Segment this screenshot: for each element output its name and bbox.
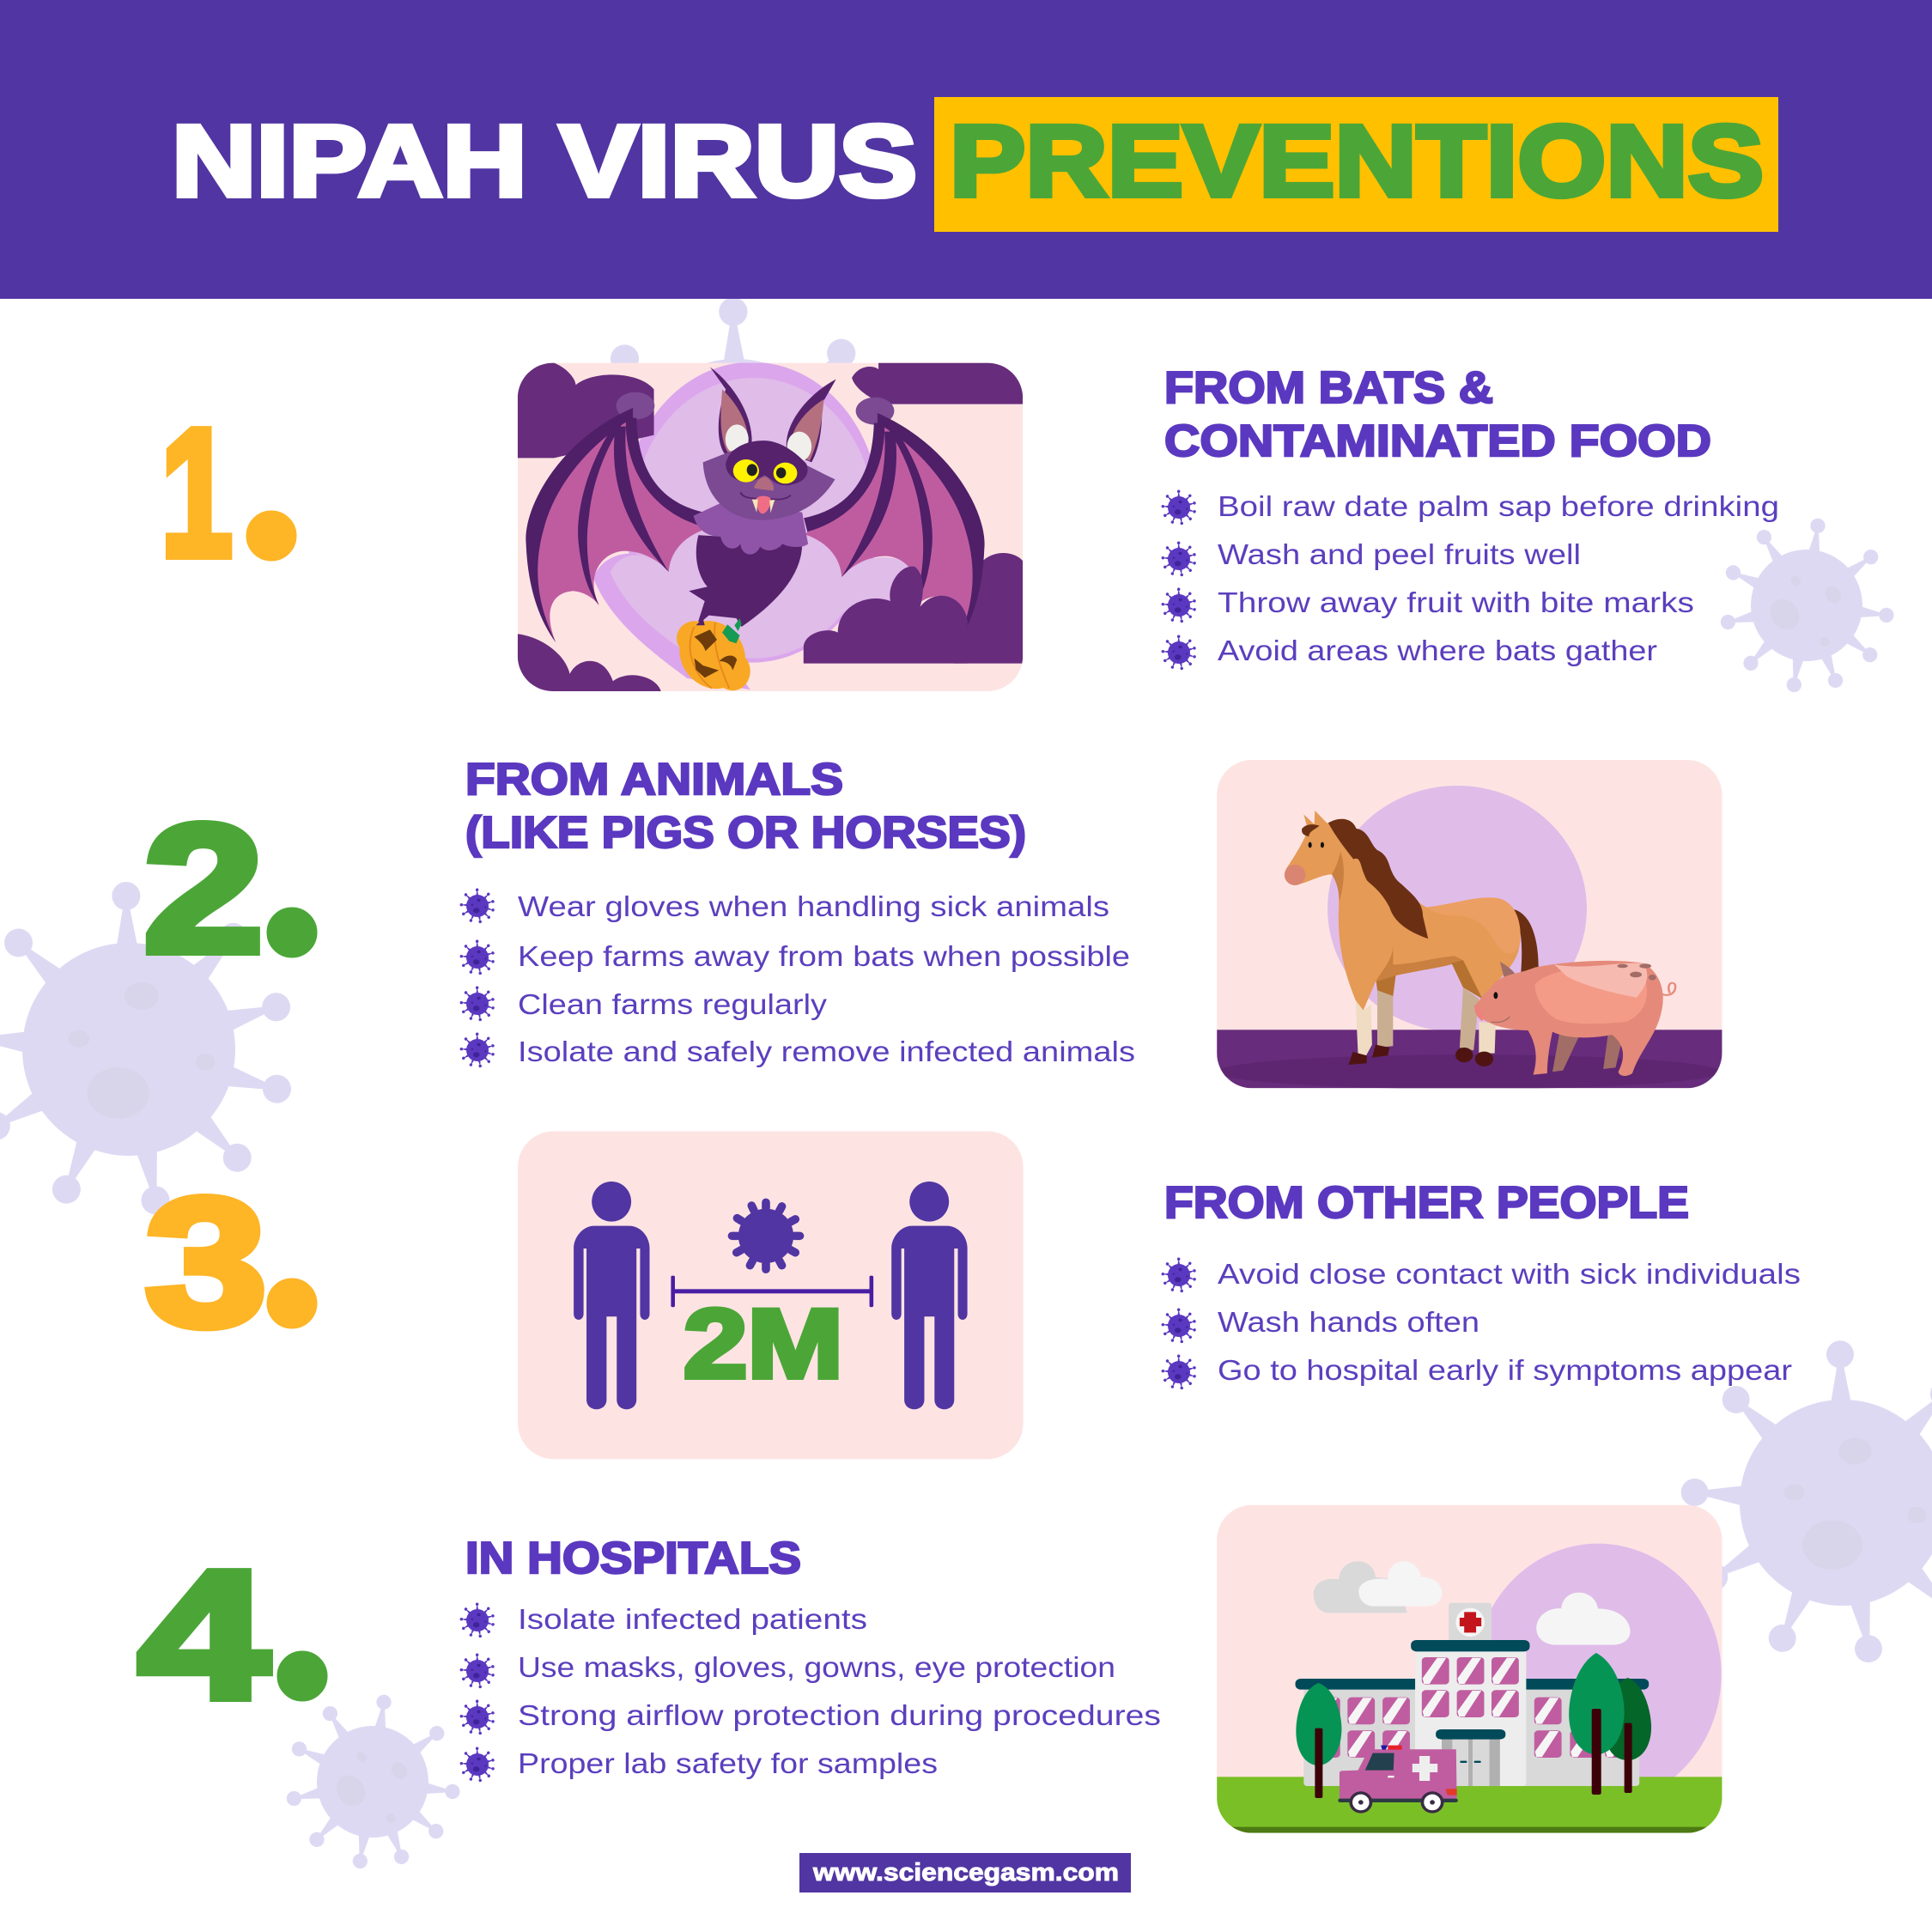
tree left	[1296, 1683, 1341, 1798]
number 2: 2	[143, 787, 264, 990]
bat head	[703, 444, 835, 520]
heading: (LIKE PIGS OR HORSES)	[465, 808, 1026, 858]
number 4: 4	[138, 1533, 269, 1736]
panel: bat illustration	[518, 362, 1023, 695]
bullet	[1161, 538, 1581, 576]
bullet: Isolate and safely remove infected animals	[518, 1036, 1135, 1067]
number 2	[143, 787, 317, 990]
pig	[1474, 961, 1675, 1076]
bullet: Clean farms regularly	[518, 988, 828, 1020]
number 3: .	[280, 1232, 304, 1328]
footer: website: www.sciencegasm.com	[812, 1859, 1119, 1886]
bullet	[1161, 586, 1694, 623]
bullet: Wash and peel fruits well	[1218, 538, 1581, 570]
bullet	[459, 987, 828, 1021]
heading	[465, 755, 1026, 858]
number 4: .	[290, 1605, 314, 1701]
number 2: .	[280, 861, 304, 957]
heading: CONTAMINATED FOOD	[1164, 416, 1711, 466]
ground	[1216, 1030, 1722, 1089]
pumpkin	[677, 618, 750, 690]
background virus: top of bat panel	[567, 297, 902, 635]
bullet: Avoid areas where bats gather	[1218, 635, 1657, 666]
bullet: Keep farms away from bats when possible	[518, 940, 1130, 972]
number 1: 1	[161, 391, 233, 594]
person left	[574, 1182, 650, 1409]
hospital building	[1296, 1603, 1649, 1786]
highlight box	[934, 97, 1778, 232]
clouds	[1314, 1561, 1631, 1645]
title: Preventions: PREVENTIONS	[950, 105, 1764, 218]
bullet: Go to hospital early if symptoms appear	[1218, 1354, 1792, 1386]
background virus: upper right	[1684, 483, 1929, 727]
distance line	[671, 1276, 873, 1307]
bat snout	[740, 477, 791, 513]
heading: FROM BATS &	[1164, 363, 1493, 413]
panel: social distance	[518, 1131, 1024, 1459]
bullet: Strong airflow protection during procedures	[518, 1699, 1161, 1731]
bullet	[459, 1651, 1115, 1688]
text block: from other people	[1161, 1178, 1801, 1389]
bullet: Use masks, gloves, gowns, eye protection	[518, 1651, 1115, 1683]
number 3	[145, 1160, 317, 1364]
pale clouds	[549, 594, 666, 691]
bat wings	[526, 392, 985, 647]
ambulance	[1338, 1746, 1458, 1814]
sun	[1327, 786, 1587, 1032]
bullet: Isolate infected patients	[518, 1603, 867, 1635]
label: 2M: 2M	[683, 1290, 843, 1399]
bat front clouds	[804, 567, 968, 664]
bullet	[459, 1603, 867, 1637]
bullet: Boil raw date palm sap before drinking	[1218, 490, 1779, 522]
sun	[1491, 1544, 1722, 1777]
bullet: Wear gloves when handling sick animals	[518, 890, 1109, 922]
bullet: Avoid close contact with sick individuals	[1218, 1258, 1801, 1290]
text block: in hospitals	[459, 1534, 1161, 1782]
title: Nipah Virus: NIPAH VIRUS	[172, 105, 917, 218]
header banner	[0, 0, 1932, 299]
number 3: 3	[145, 1160, 267, 1364]
background virus: left	[0, 882, 295, 1217]
horse	[1285, 811, 1539, 1066]
dark clouds	[518, 363, 1023, 691]
bullet	[1161, 635, 1657, 670]
bat ruff	[694, 502, 808, 555]
bat body	[689, 535, 802, 627]
background virus: bottom centre-left	[250, 1659, 495, 1904]
bullet: Proper lab safety for samples	[518, 1747, 938, 1779]
heading: FROM ANIMALS	[465, 755, 843, 805]
ground	[1217, 1777, 1722, 1833]
tree right	[1569, 1653, 1625, 1795]
number 1: .	[259, 465, 283, 561]
bat ears	[710, 367, 836, 462]
text block: from animals	[459, 755, 1135, 1067]
number 4	[138, 1533, 327, 1736]
footer: website	[799, 1853, 1131, 1893]
bullet	[459, 1699, 1161, 1735]
bullet	[459, 1747, 938, 1782]
bullet: Wash hands often	[1218, 1306, 1479, 1338]
bat eyes	[733, 459, 797, 483]
tree dark right	[1605, 1678, 1651, 1793]
virus icon	[728, 1199, 804, 1273]
moon	[593, 362, 913, 690]
panel: hospital	[1217, 1505, 1722, 1833]
text block: from bats	[1161, 363, 1779, 670]
heading: IN HOSPITALS	[465, 1534, 801, 1583]
bullet: Throw away fruit with bite marks	[1218, 586, 1694, 618]
heading	[1164, 363, 1711, 466]
person right	[891, 1182, 968, 1409]
panel: horse and pig	[1216, 760, 1722, 1089]
background virus: lower right	[1680, 1340, 1932, 1665]
heading: FROM OTHER PEOPLE	[1164, 1178, 1689, 1228]
bullet	[1161, 1306, 1479, 1343]
